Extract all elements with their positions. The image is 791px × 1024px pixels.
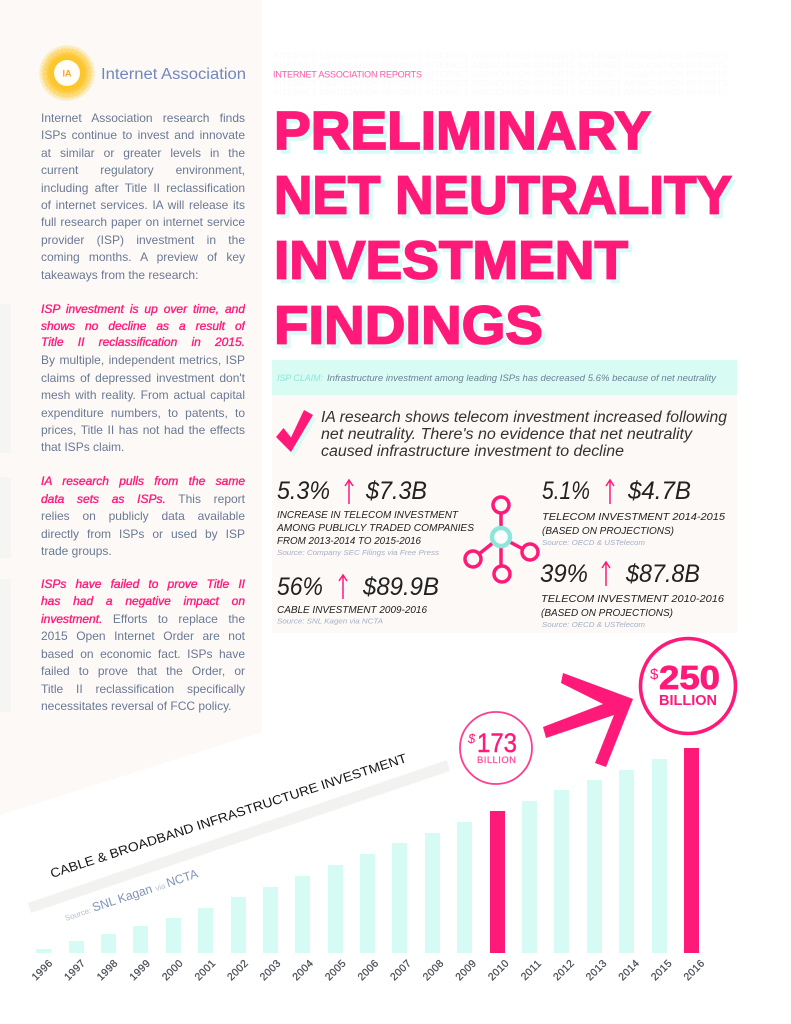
year labels — [29, 957, 707, 983]
text block: introduction: takeaways from the research: — [41, 268, 198, 282]
year labels: 2002 — [225, 957, 251, 983]
text block: ISPs failed to prove: ISPs have failed to prove Title II — [41, 577, 245, 591]
text block: ISP investment is up: Title II reclassification in 2015. — [41, 335, 245, 349]
text block: introduction: ISPs continue to invest and innovate — [41, 128, 245, 142]
year labels: 2016 — [681, 957, 707, 983]
year labels: 2009 — [453, 957, 479, 983]
chart source: Source: SNL Kagan via NCTA — [63, 866, 200, 924]
year labels: 1997 — [62, 957, 88, 983]
text block: ISPs failed to prove: Title II reclassification specifically — [41, 682, 245, 696]
text block: ISP investment is up: that ISPs claim. — [41, 440, 124, 454]
panel: ISP claim banner: Infrastructure investment among leading ISPs has decreased 5.6% because of net neutrality — [327, 373, 717, 384]
faint background text pattern: INTERNET ASSOCIATION REPORTS INTERNET ASSOCIATION REPORTS INTERNET ASSOCIATION REPORTS — [273, 87, 728, 97]
stat: cable investment: $89.9B — [362, 573, 439, 601]
year labels: 2006 — [355, 957, 381, 983]
title — [274, 101, 732, 356]
faint background text pattern: INTERNET ASSOCIATION REPORTS INTERNET ASSOCIATION REPORTS INTERNET ASSOCIATION REPORTS — [273, 69, 728, 79]
title: FINDINGS — [274, 296, 543, 356]
year labels: 1996 — [29, 957, 55, 983]
text block: ISPs failed to prove: based on economic fact. ISPs have — [41, 647, 245, 661]
callout: $173 billion: 173 — [477, 728, 517, 758]
stat: telecom investment among public companies: Source: Company SEC Filings via Free Press — [277, 548, 439, 557]
text block: ISPs failed to prove: failed to prove that the Order, or — [41, 664, 245, 678]
year labels: 2012 — [551, 957, 577, 983]
stat: telecom investment 2010-2016: $87.8B — [625, 560, 700, 588]
text block: ISPs failed to prove: investment. Efforts to replace the — [41, 612, 245, 626]
text block: ISP investment is up: prices, Title II has not had the effects — [41, 423, 245, 437]
text block: introduction: provider (ISP) investment in the — [41, 233, 245, 247]
year labels: 2003 — [258, 957, 284, 983]
stat: telecom investment 2014-2015: (BASED ON PROJECTIONS) — [542, 526, 674, 537]
chart title: CABLE & BROADBAND INFRASTRUCTURE INVESTMENT — [48, 750, 409, 881]
text block: ISPs failed to prove: 2015 Open Internet Order are not — [41, 629, 245, 643]
stat: telecom investment 2010-2016: Source: OECD & USTelecom — [542, 620, 645, 629]
faint background text pattern — [273, 51, 728, 97]
title: INVESTMENT — [274, 230, 628, 290]
year labels: 2014 — [616, 957, 642, 983]
text block: introduction: of internet services. IA will release its — [41, 198, 245, 212]
panel: ISP claim banner — [272, 360, 737, 395]
faint background text pattern: INTERNET ASSOCIATION REPORTS INTERNET ASSOCIATION REPORTS INTERNET ASSOCIATION REPORTS — [273, 78, 728, 88]
text block: ISPs failed to prove: has had a negative impact on — [41, 594, 245, 608]
callout: $173 billion: BILLION — [477, 755, 516, 766]
stat: telecom investment 2014-2015 — [542, 477, 725, 547]
year labels: 2013 — [584, 957, 610, 983]
text block: ISP investment is up — [41, 302, 245, 454]
year labels: 2001 — [192, 957, 218, 983]
stat: telecom investment 2014-2015: Source: OECD & USTelecom — [542, 538, 645, 547]
text block: ISP investment is up: ISP investment is up over time, and — [41, 302, 245, 316]
icon: check mark — [276, 410, 316, 456]
text block: ISP investment is up: claims of depressed investment don't — [41, 371, 245, 385]
callout: $250 billion: $ — [650, 666, 659, 683]
arrow — [543, 673, 633, 767]
title: NET NEUTRALITY — [274, 166, 732, 226]
bar chart — [29, 748, 707, 983]
text block: ISP investment is up: By multiple, independent metrics, ISP — [41, 353, 245, 367]
year labels: 2004 — [290, 957, 316, 983]
year labels: 2007 — [388, 957, 414, 983]
text block: IA research data sets: IA research pulls from the same — [41, 474, 245, 488]
eyebrow heading: INTERNET ASSOCIATION REPORTS — [273, 70, 422, 80]
year labels: 1999 — [127, 957, 153, 983]
stat: telecom investment among public companies — [276, 477, 474, 557]
text block: IA research data sets: relies on publicly data available — [41, 509, 245, 523]
stat: telecom investment 2010-2016: 39% — [540, 560, 588, 588]
text block: IA research data sets: trade groups. — [41, 544, 112, 558]
faint background text pattern: INTERNET ASSOCIATION REPORTS INTERNET ASSOCIATION REPORTS INTERNET ASSOCIATION REPORTS — [273, 60, 728, 70]
year labels: 2008 — [421, 957, 447, 983]
text block: introduction: Internet Association research finds — [41, 111, 245, 125]
callout: $250 billion: BILLION — [659, 693, 717, 709]
year labels: 2011 — [519, 958, 544, 983]
finding statement: IA research shows telecom investment increased following — [321, 409, 727, 426]
callout: $173 billion — [460, 712, 532, 784]
stat: telecom investment among public companies: INCREASE IN TELECOM INVESTMENT — [277, 510, 459, 521]
text block: ISP investment is up: mesh with reality. From actual capital — [41, 388, 245, 402]
stat: telecom investment 2014-2015: $4.7B — [627, 477, 691, 505]
text block: introduction — [41, 111, 245, 282]
text block: ISPs failed to prove: necessitates reversal of FCC policy. — [41, 699, 232, 713]
text block: introduction: at similar or greater levels in the — [41, 146, 245, 160]
bars — [36, 748, 699, 953]
stat: telecom investment 2010-2016: (BASED ON PROJECTIONS) — [541, 608, 673, 619]
stat: telecom investment 2014-2015: 5.1% — [542, 477, 590, 505]
year labels: 2015 — [649, 957, 675, 983]
logo wordmark: Internet Association — [101, 66, 246, 83]
callout: $173 billion: $ — [467, 731, 476, 746]
panel: ISP claim banner: ISP CLAIM: — [277, 373, 323, 384]
stat: cable investment: CABLE INVESTMENT 2009-2016 — [277, 605, 427, 616]
title: PRELIMINARY — [274, 101, 651, 161]
stat: telecom investment 2010-2016 — [540, 560, 724, 629]
stat: cable investment: Source: SNL Kagen via NCTA — [277, 616, 383, 626]
text block: ISP investment is up: shows no decline as a result of — [41, 319, 245, 333]
text block: introduction: current regulatory environment, — [41, 163, 245, 177]
stat: telecom investment 2010-2016: TELECOM INVESTMENT 2010-2016 — [541, 594, 724, 605]
stat: telecom investment among public companies: 5.3% — [277, 477, 330, 505]
year labels: 2000 — [160, 957, 186, 983]
panel: research findings — [272, 395, 737, 633]
icon: Internet Association sun logo: IA — [62, 68, 72, 78]
finding statement — [321, 409, 727, 460]
text block: IA research data sets: directly from ISPs or used by ISP — [41, 527, 245, 541]
stat: telecom investment among public companies: $7.3B — [365, 477, 427, 505]
finding statement: caused infrastructure investment to decline — [321, 443, 624, 460]
text block: introduction: coming months. A preview of key — [41, 250, 245, 264]
year labels: 2005 — [323, 957, 349, 983]
callout: $250 billion: 250 — [659, 659, 720, 696]
year labels: 2010 — [486, 957, 512, 983]
panel: left sidebar background — [0, 0, 262, 815]
chart title band — [28, 760, 450, 913]
stat: telecom investment among public companies: FROM 2013-2014 TO 2015-2016 — [277, 536, 421, 547]
finding statement: net neutrality. There's no evidence that net neutrality — [321, 426, 693, 443]
icon: Internet Association sun logo — [39, 45, 95, 101]
text block: IA research data sets: data sets as ISPs. This report — [41, 492, 245, 506]
stat: cable investment — [277, 573, 439, 626]
stat: telecom investment among public companies: AMONG PUBLICLY TRADED COMPANIES — [276, 523, 474, 534]
icon: network hub — [465, 497, 538, 582]
text block: introduction: full research paper on internet service — [41, 215, 245, 229]
callout: $250 billion — [640, 638, 736, 734]
text block: ISPs failed to prove — [41, 577, 245, 713]
stat: cable investment: 56% — [277, 573, 323, 601]
year labels: 1998 — [95, 957, 121, 983]
text block: introduction: including after Title II reclassification — [41, 181, 245, 195]
stat: telecom investment 2014-2015: TELECOM INVESTMENT 2014-2015 — [542, 512, 725, 523]
faint background text pattern: INTERNET ASSOCIATION REPORTS INTERNET ASSOCIATION REPORTS INTERNET ASSOCIATION REPORTS — [273, 51, 728, 61]
text block: ISP investment is up: expenditure numbers, to patents, to — [41, 406, 245, 420]
text block: IA research data sets — [41, 474, 245, 558]
